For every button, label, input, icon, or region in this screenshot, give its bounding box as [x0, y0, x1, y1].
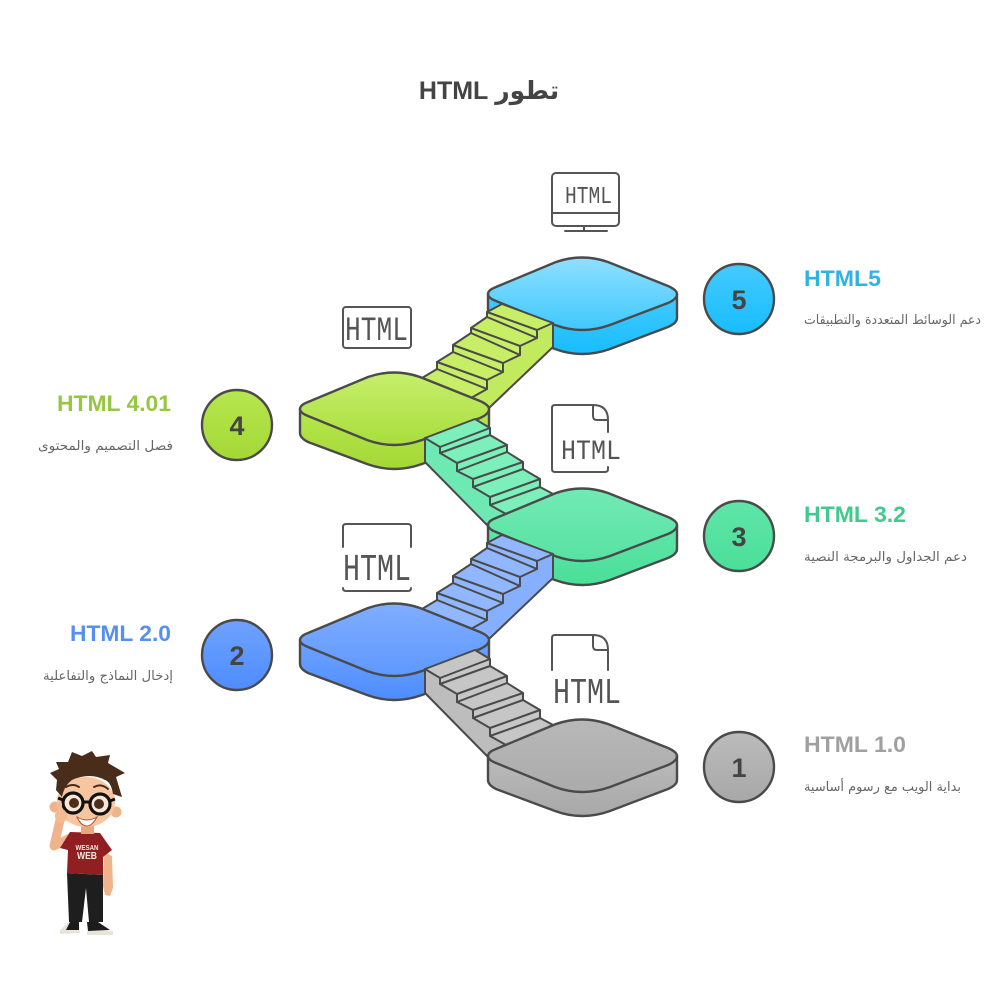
step 2 badge [202, 620, 272, 690]
platform 3 [488, 488, 677, 585]
step 4 label [38, 391, 173, 454]
platform 2 [300, 604, 489, 700]
platform 1 [488, 720, 677, 816]
stairs 1 to 2 [425, 650, 555, 757]
icon: framed HTML [343, 307, 411, 351]
mascot character [50, 751, 125, 935]
icon: document HTML 3 [552, 405, 621, 472]
platform 4 [300, 372, 489, 469]
icon: framed HTML: HTML [345, 313, 408, 351]
step 1 badge: 1 [731, 753, 747, 783]
step 3 label [804, 502, 967, 565]
step 5 badge [704, 264, 774, 334]
step 3 badge: 3 [731, 522, 747, 552]
step 5 label: HTML5 [804, 266, 881, 291]
step 4 label: فصل التصميم والمحتوى [38, 439, 173, 454]
stairs 2 to 3 [422, 535, 553, 639]
step 4 label: HTML 4.01 [57, 391, 171, 416]
step 3 label: دعم الجداول والبرمجة النصية [804, 550, 967, 565]
icon: monitor HTML [552, 173, 619, 231]
icon: document HTML 3: HTML [561, 437, 621, 468]
mascot character: WEB [77, 851, 97, 862]
icon: document HTML 1: HTML [553, 673, 621, 714]
step 2 label: HTML 2.0 [70, 621, 171, 646]
stairs 3 to 4 [425, 419, 555, 526]
step 2 label: إدخال النماذج والتفاعلية [43, 669, 173, 684]
platform 5 [488, 258, 677, 354]
icon: monitor HTML: HTML [565, 184, 612, 211]
step 5 label [804, 266, 981, 328]
step 5 badge: 5 [731, 285, 747, 315]
step 2 badge: 2 [229, 641, 245, 671]
step 5 label: دعم الوسائط المتعددة والتطبيقات [804, 313, 981, 328]
step 3 label: HTML 3.2 [804, 502, 906, 527]
icon: bracket HTML [343, 524, 411, 592]
step 1 label: بداية الويب مع رسوم أساسية [804, 778, 961, 795]
title: تطور HTML [419, 77, 559, 106]
icon: bracket HTML: HTML [343, 549, 411, 592]
step 4 badge [202, 390, 272, 460]
mascot character: WESAN [76, 843, 98, 852]
step 3 badge [704, 501, 774, 571]
step 2 label [43, 621, 173, 684]
step 1 label [804, 732, 961, 795]
step 1 label: HTML 1.0 [804, 732, 906, 757]
stairs 4 to 5 [422, 304, 553, 408]
step 1 badge [704, 732, 774, 802]
step 4 badge: 4 [229, 411, 245, 441]
icon: document HTML 1 [552, 635, 621, 714]
